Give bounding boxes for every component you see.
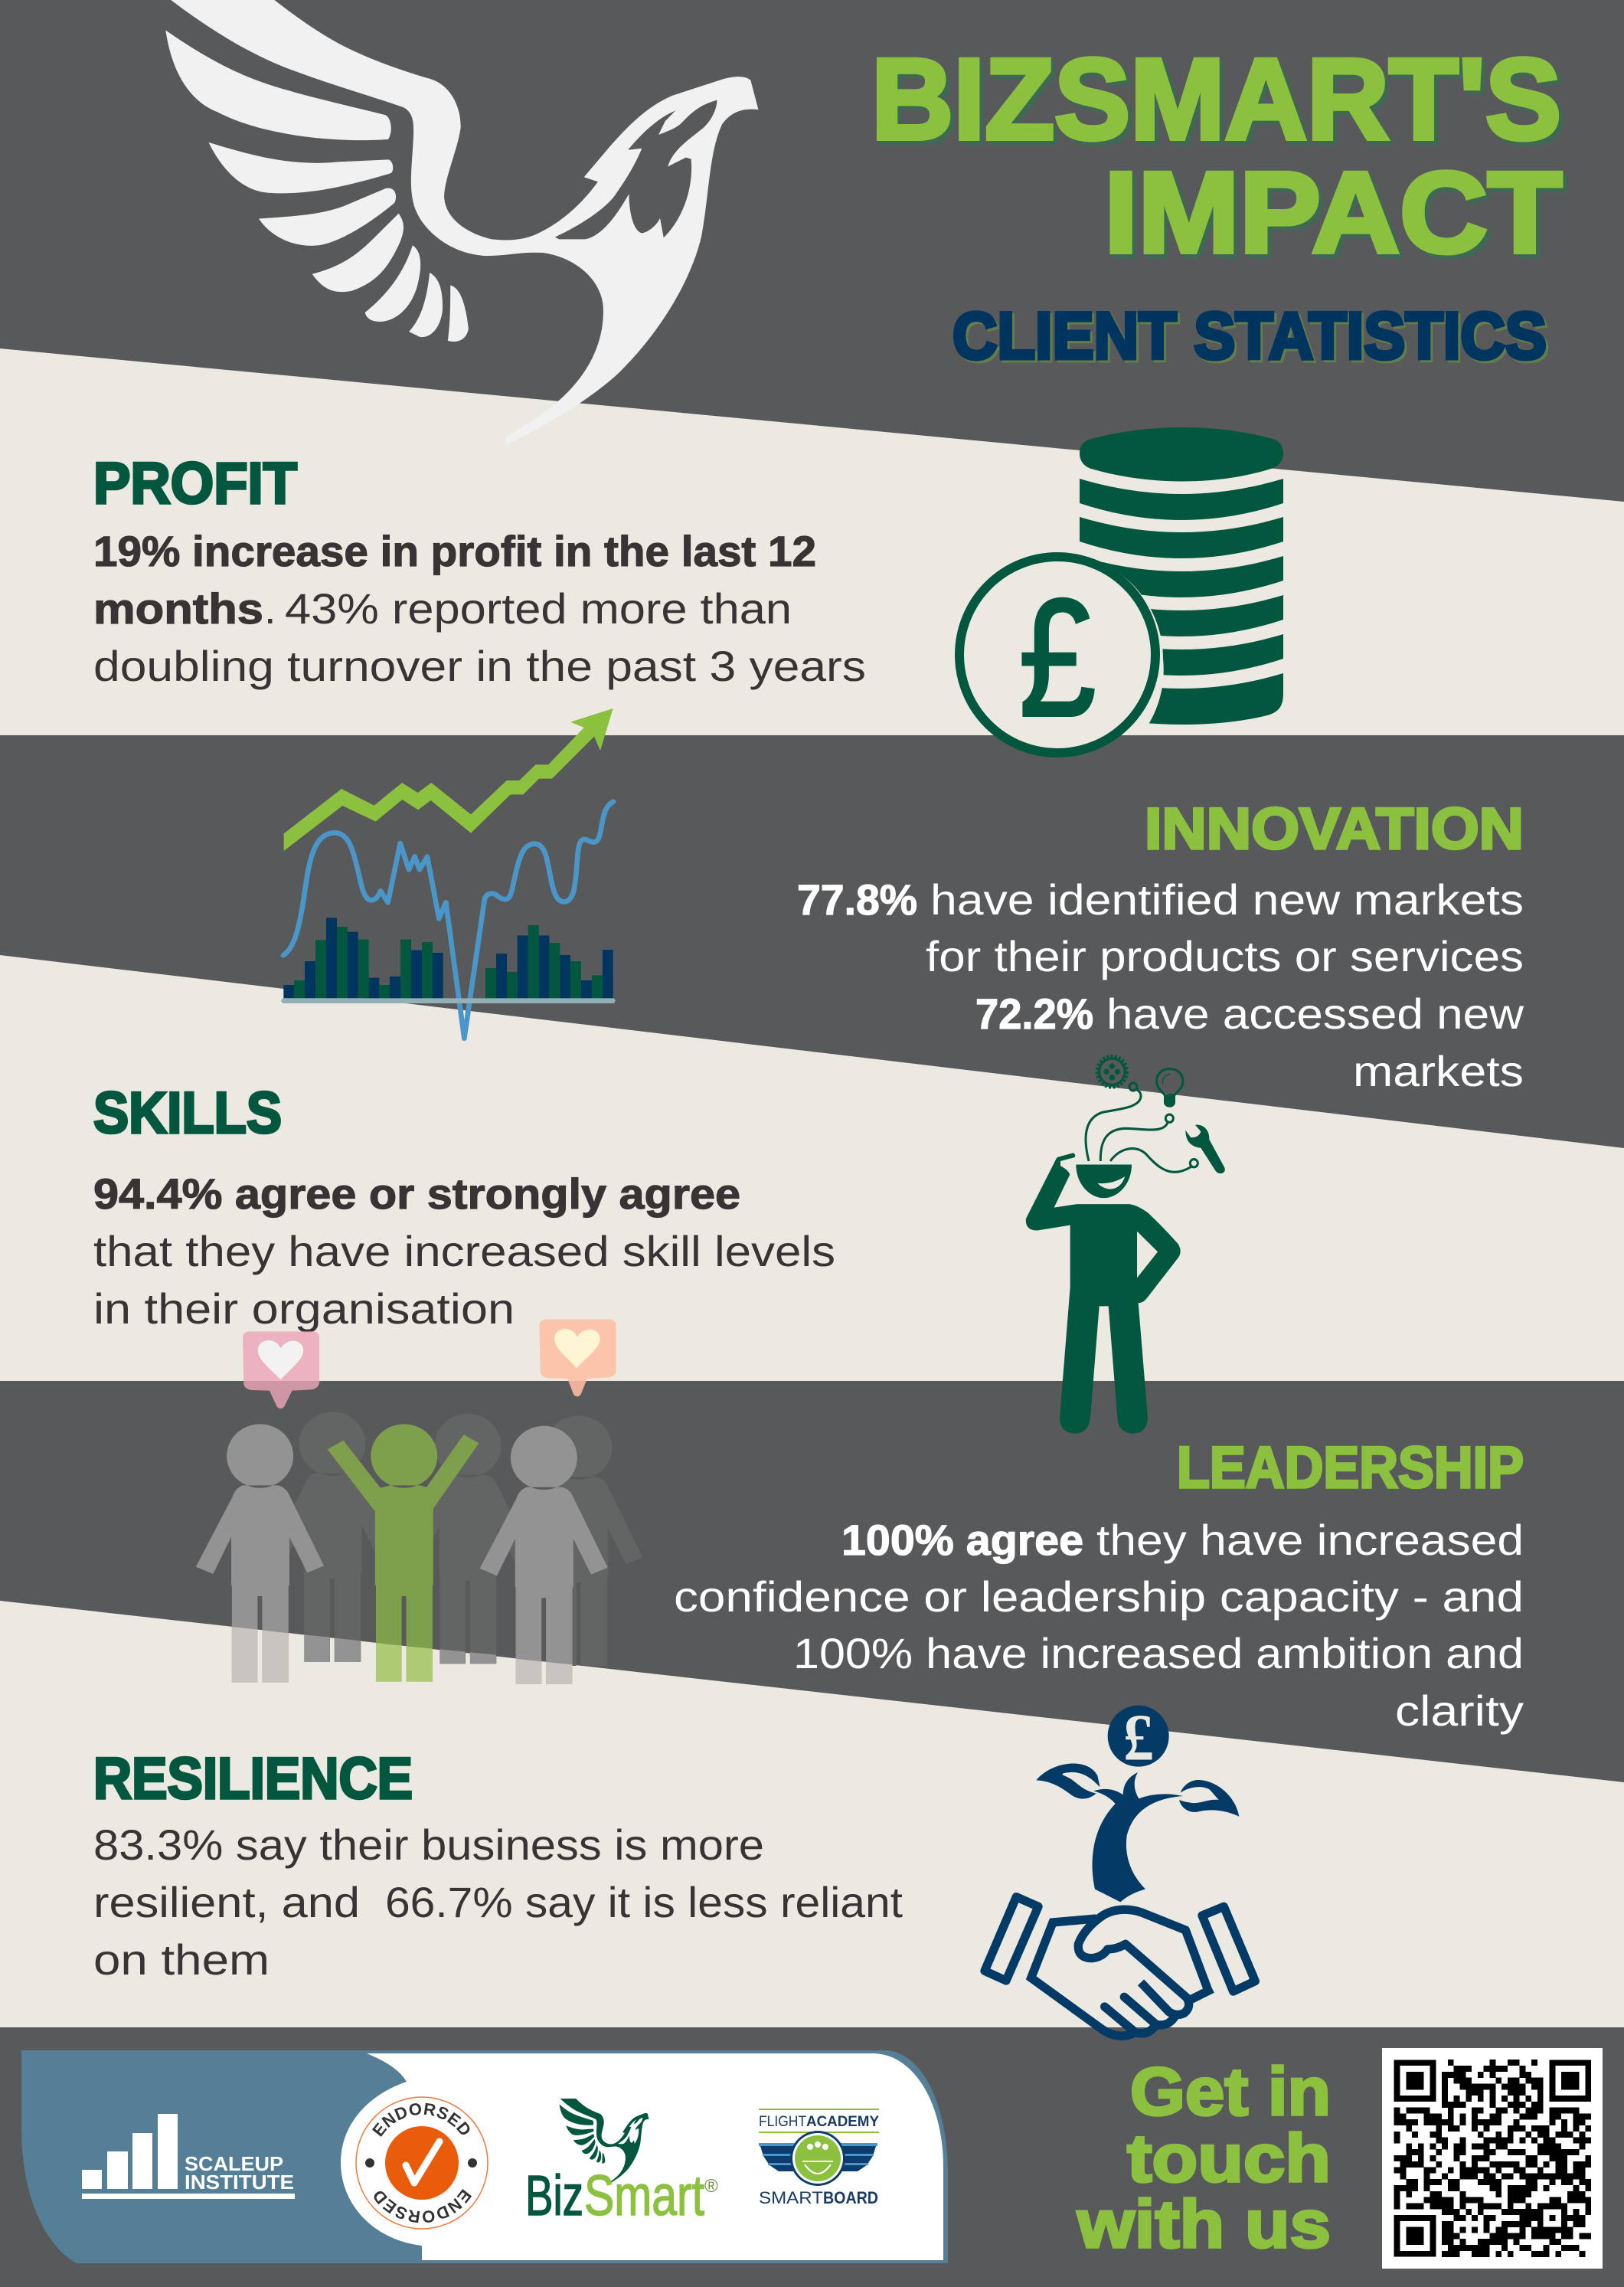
bar chart: navy bars [283,918,613,998]
logo: flight academy smartboard [759,2109,879,2207]
text block: innovation stats [797,875,1524,1095]
text block: profit stats: 43% reported more than [285,584,792,633]
text block: leadership stats [674,1516,1524,1735]
figure: open head with smile [1076,1164,1132,1198]
panel: endorsement logos [21,2050,948,2263]
text block: profit stats: 19% increase in profit in the last 12 [93,527,816,575]
light band: skills [0,955,1624,1381]
logo: scaleup institute: INSTITUTE [185,2171,294,2194]
logo: endorsed badge [355,2096,489,2230]
text block: resilience stats [93,1821,903,1984]
subtitle: client statistics: CLIENT STATISTICS [953,299,1547,373]
text block: profit stats [93,527,866,690]
icon: handshake [985,1897,1255,2036]
text block: leadership stats: clarity [1395,1687,1524,1735]
chart: growth arrow, trend line and bars [281,708,616,1039]
text block: innovation stats: markets [1353,1047,1524,1095]
logo: scaleup institute: SCALEUP [185,2152,283,2175]
icon: peach heart bubble [539,1320,616,1396]
panel: blue background [21,2050,948,2263]
figure: front left person [196,1424,324,1683]
panel: white background [341,2053,943,2260]
text block: innovation stats: have accessed new [1106,990,1524,1038]
text block: innovation stats: have identified new markets [930,875,1524,924]
title [871,34,1562,276]
logo: flight academy smartboard: ACADEMY [806,2114,879,2130]
heading: skills: SKILLS [93,1081,282,1146]
logo: endorsed badge: ENDORSED [372,2103,470,2137]
figure: man body [1026,1153,1181,1434]
logo: flight academy smartboard: SMART [759,2188,823,2207]
text block: skills stats: 94.4% agree or strongly agree [93,1170,740,1218]
text block: leadership stats: 100% have increased ambition and [793,1629,1524,1677]
logo: scaleup institute [82,2114,295,2199]
text block: leadership stats: 100% agree [841,1516,1083,1564]
panel: skills text [93,1081,835,1333]
call to action: get in touch: with us [1077,2186,1331,2262]
figure: back people [268,1412,642,1666]
icon: pound coin [1108,1700,1169,1774]
text block: innovation stats: 77.8% [797,875,917,924]
heading: resilience: RESILIENCE [93,1746,413,1811]
logo: bizsmart [525,2099,718,2227]
panel: resilience text [93,1746,903,1984]
logo: flight academy smartboard: BOARD [823,2188,878,2207]
heading: innovation: INNOVATION [1145,797,1524,862]
text block: skills stats [93,1170,835,1333]
text block: profit stats: . [264,584,276,633]
text block: resilience stats: resilient, and [93,1878,360,1926]
text block: resilience stats: on them [93,1935,270,1984]
text block: profit stats: doubling turnover in the past 3 years [93,642,866,690]
panel: leadership text [674,1435,1524,1735]
QR code [1382,2048,1603,2269]
panel: profit text [93,451,866,690]
icon: white phoenix logo [165,0,758,444]
call to action: get in touch: touch [1127,2120,1331,2196]
icon: coin stack with pound: £ [1019,565,1096,751]
heading: leadership: LEADERSHIP [1177,1435,1524,1500]
text block: innovation stats: 72.2% [975,990,1093,1038]
text block: skills stats: in their organisation [93,1284,515,1333]
text block: skills stats: that they have increased skill levels [93,1227,835,1275]
icon: pink heart bubble [243,1331,319,1409]
bar chart: green bars [294,925,603,998]
icon: idea wires [1086,1083,1198,1172]
arrow: green growth arrow [284,708,613,851]
heading: profit: PROFIT [93,451,297,516]
text block: profit stats: months [93,584,263,633]
light band: resilience [0,1601,1624,2027]
figure: front right person [480,1426,608,1684]
icon: group of people with heart bubbles [196,1320,642,1684]
icon: sapling [1036,1764,1239,1902]
icon: light bulb [1157,1068,1183,1108]
icon: gear [1097,1056,1127,1088]
text block: leadership stats: they have increased [1096,1516,1524,1564]
icon: handshake with money plant [985,1700,1255,2036]
text block: leadership stats: confidence or leadership capacity - and [674,1572,1524,1621]
logo: bizsmart: Smart [584,2164,704,2227]
logo: bizsmart: Biz [525,2164,583,2227]
light band: profit [0,348,1624,735]
logo: bizsmart: ® [704,2176,718,2197]
text block: resilience stats: 66.7% say it is less reliant [385,1878,903,1926]
title: IMPACT [1104,148,1562,276]
icon: pound coin: £ [1123,1700,1154,1774]
icon: wrench [1185,1125,1225,1173]
line chart: blue trend line [283,802,613,1039]
logo: endorsed badge: ENDORSED [374,2189,472,2223]
logo: flight academy smartboard: FLIGHT [759,2114,806,2130]
panel: innovation text [797,797,1524,1095]
call to action: get in touch [1077,2053,1331,2262]
text block: resilience stats: 83.3% say their business is more [93,1821,764,1869]
icon: thinking man with gear, bulb and wrench [1026,1056,1225,1434]
text block: innovation stats: for their products or services [926,932,1524,980]
call to action: get in touch: Get in [1130,2053,1331,2129]
icon: coin stack with pound [949,427,1283,753]
title: BIZSMART'S [871,34,1561,163]
figure: green person with raised arms [328,1424,479,1682]
